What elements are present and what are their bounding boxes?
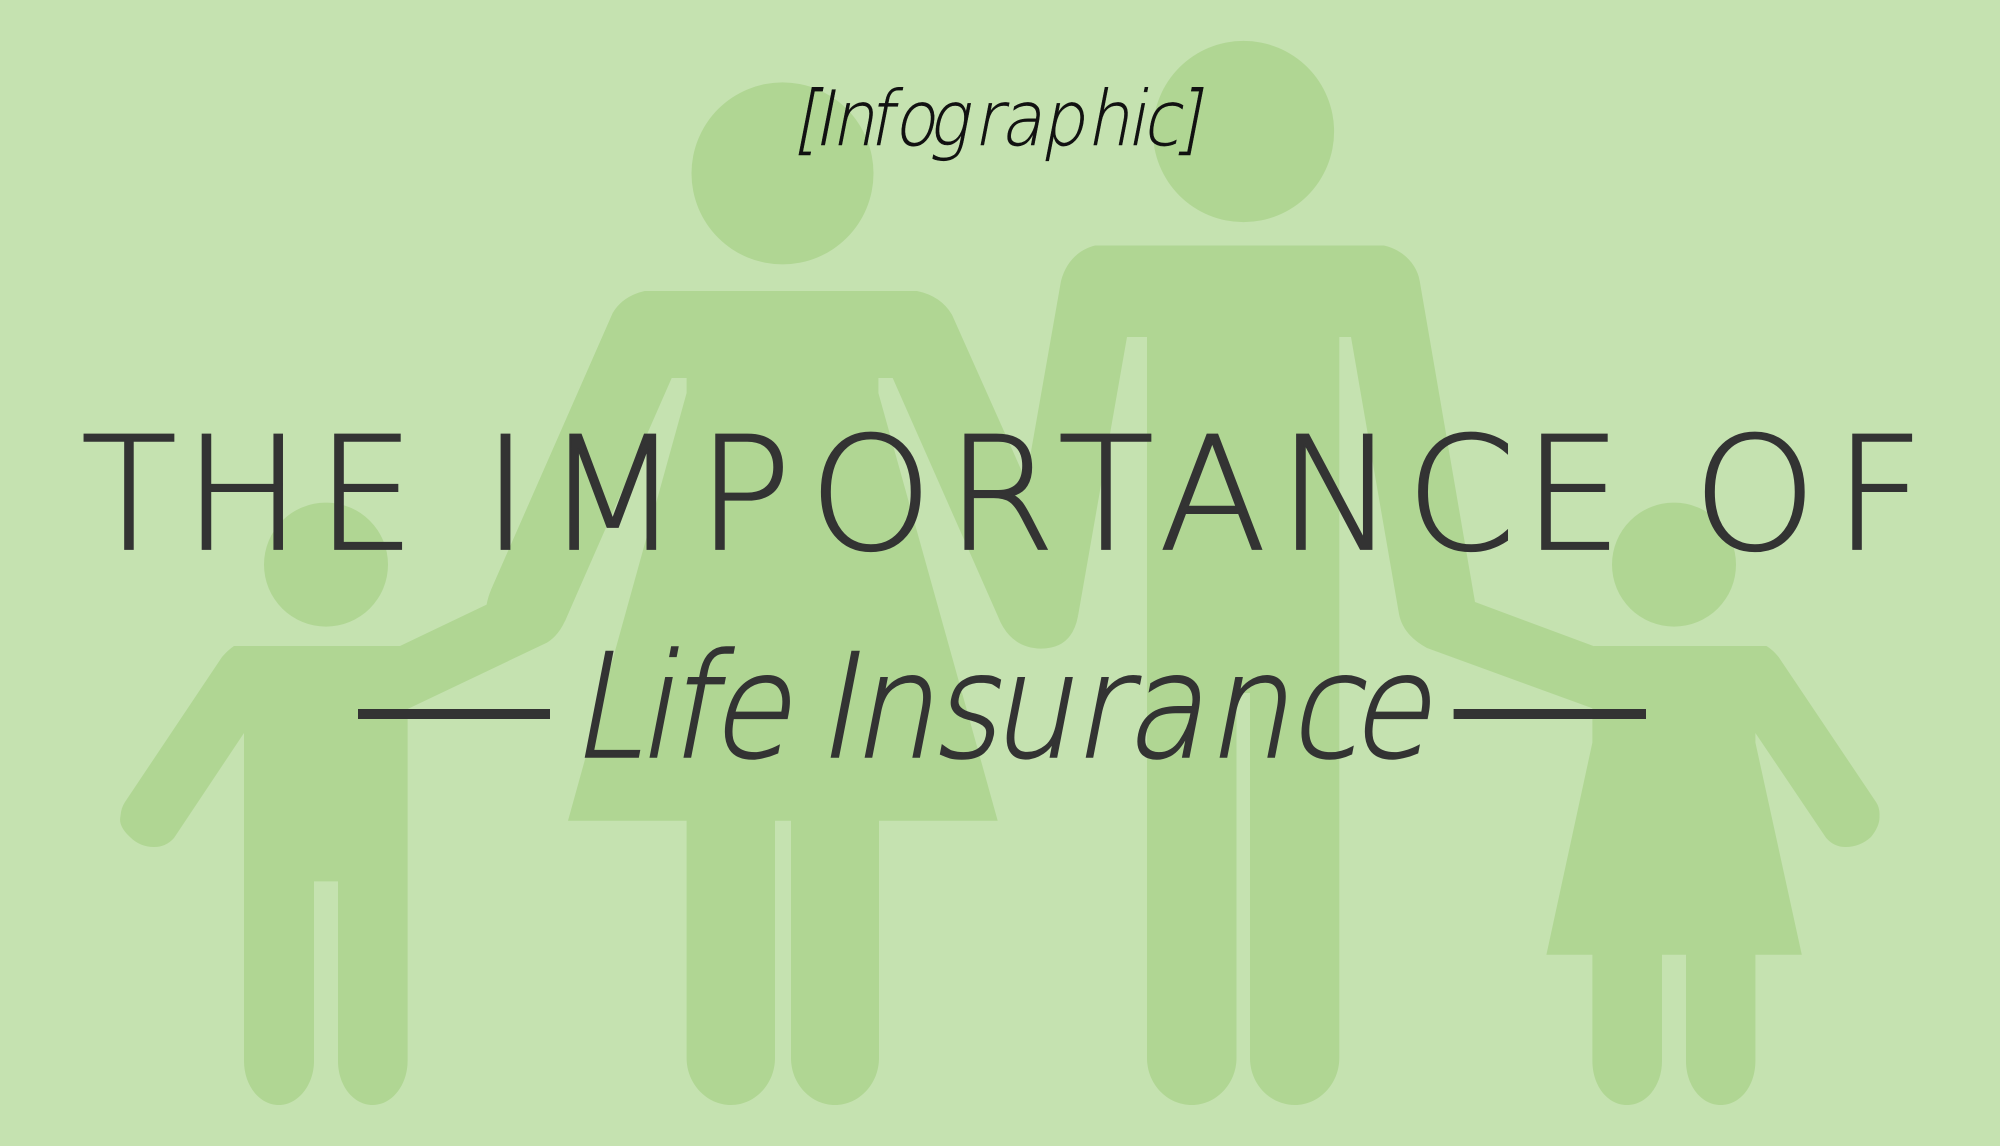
- decorative rule right: [1454, 709, 1646, 719]
- heading: Life Insurance: Life Insurance: [0, 624, 1455, 791]
- figure: father: [1026, 41, 1594, 1105]
- figure: girl: [1546, 503, 1880, 1105]
- decorative rule left: [358, 709, 550, 719]
- heading: THE IMPORTANCE OF: THE IMPORTANCE OF: [0, 404, 1924, 587]
- figure: mother: [491, 82, 1078, 1105]
- label: [Infographic]: [Infographic]: [789, 75, 1213, 164]
- figure: boy: [120, 312, 660, 1105]
